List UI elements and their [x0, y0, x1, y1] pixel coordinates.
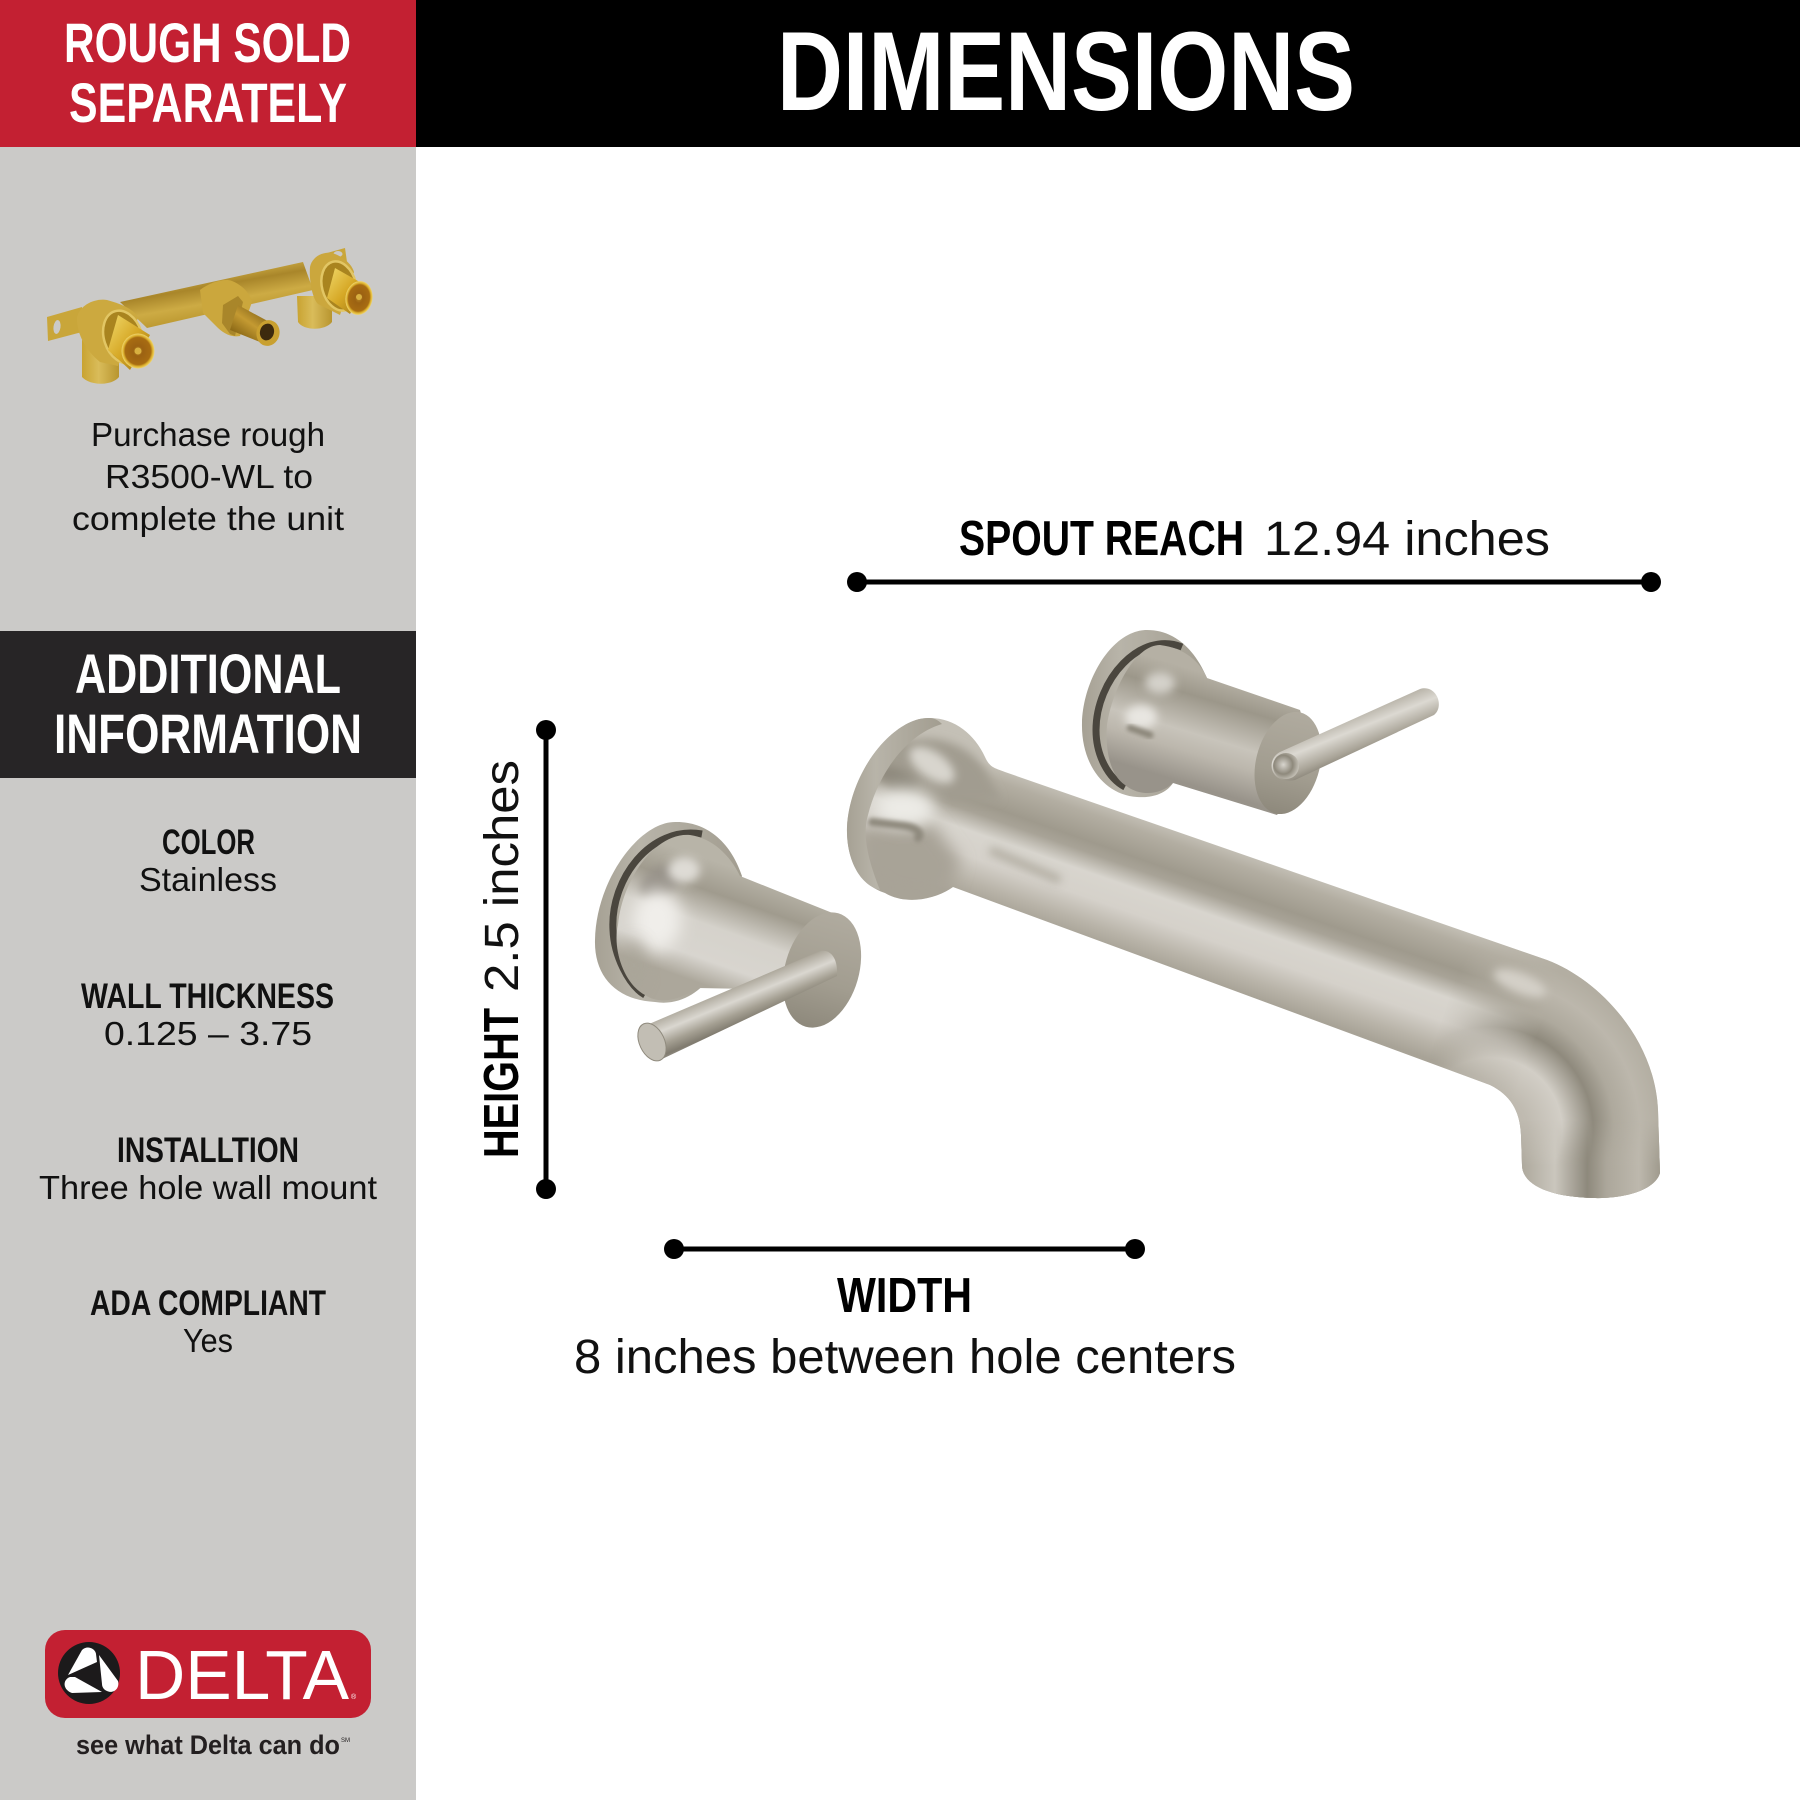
- heading: additional information: [0, 631, 416, 778]
- logo: delta: ®: [351, 1693, 357, 1701]
- dimension: width: 8 inches between hole centers: [574, 1331, 1236, 1384]
- logo: delta: [45, 1630, 371, 1760]
- dimension: spout reach: [847, 512, 1661, 592]
- dimension: spout reach: SPOUT REACH: [959, 512, 1244, 566]
- text block: purchase rough: R3500-WL to: [105, 458, 313, 495]
- dimension: spout reach: 12.94 inches: [1264, 513, 1550, 566]
- text block: ada compliant: [90, 1284, 326, 1359]
- text block: wall thickness: WALL THICKNESS: [81, 977, 334, 1016]
- dimension: height: 2.5 inches: [476, 760, 529, 992]
- text block: color: Stainless: [139, 861, 277, 898]
- text block: wall thickness: [81, 977, 334, 1052]
- dimension: width: WIDTH: [837, 1269, 972, 1323]
- text block: purchase rough: Purchase rough: [91, 416, 325, 453]
- text block: purchase rough: complete the unit: [72, 500, 344, 537]
- text block: ada compliant: Yes: [183, 1322, 233, 1359]
- logo: delta: DELTA: [135, 1636, 349, 1714]
- icon: brass rough-in valve: [47, 248, 375, 384]
- panel: left sidebar: [0, 0, 416, 1800]
- text block: wall thickness: 0.125 – 3.75: [104, 1015, 312, 1052]
- dimension: width: [574, 1239, 1236, 1384]
- icon: right handle: [1082, 630, 1439, 821]
- text block: installtion: INSTALLTION: [117, 1131, 299, 1170]
- text block: color: [139, 823, 277, 898]
- heading: additional information: ADDITIONAL: [75, 642, 341, 705]
- text block: ada compliant: ADA COMPLIANT: [90, 1284, 326, 1323]
- panel: rough sold separately banner: [0, 0, 416, 147]
- text block: installtion: [39, 1131, 377, 1206]
- panel: rough sold separately banner: ROUGH SOLD: [64, 11, 351, 74]
- title: dimensions banner: DIMENSIONS: [777, 9, 1355, 134]
- title: dimensions banner: [416, 0, 1800, 147]
- dimension: height: [475, 720, 556, 1199]
- logo: delta: SM: [341, 1738, 350, 1744]
- text block: purchase rough: [72, 416, 344, 537]
- icon: faucet spout: [846, 718, 1660, 1198]
- logo: delta: see what Delta can do: [76, 1730, 340, 1760]
- heading: additional information: INFORMATION: [54, 702, 362, 765]
- text block: installtion: Three hole wall mount: [39, 1169, 377, 1206]
- icon: left handle: [595, 822, 874, 1065]
- text block: color: COLOR: [162, 823, 255, 862]
- panel: rough sold separately banner: SEPARATELY: [69, 71, 347, 134]
- dimension: height: HEIGHT: [475, 1008, 529, 1158]
